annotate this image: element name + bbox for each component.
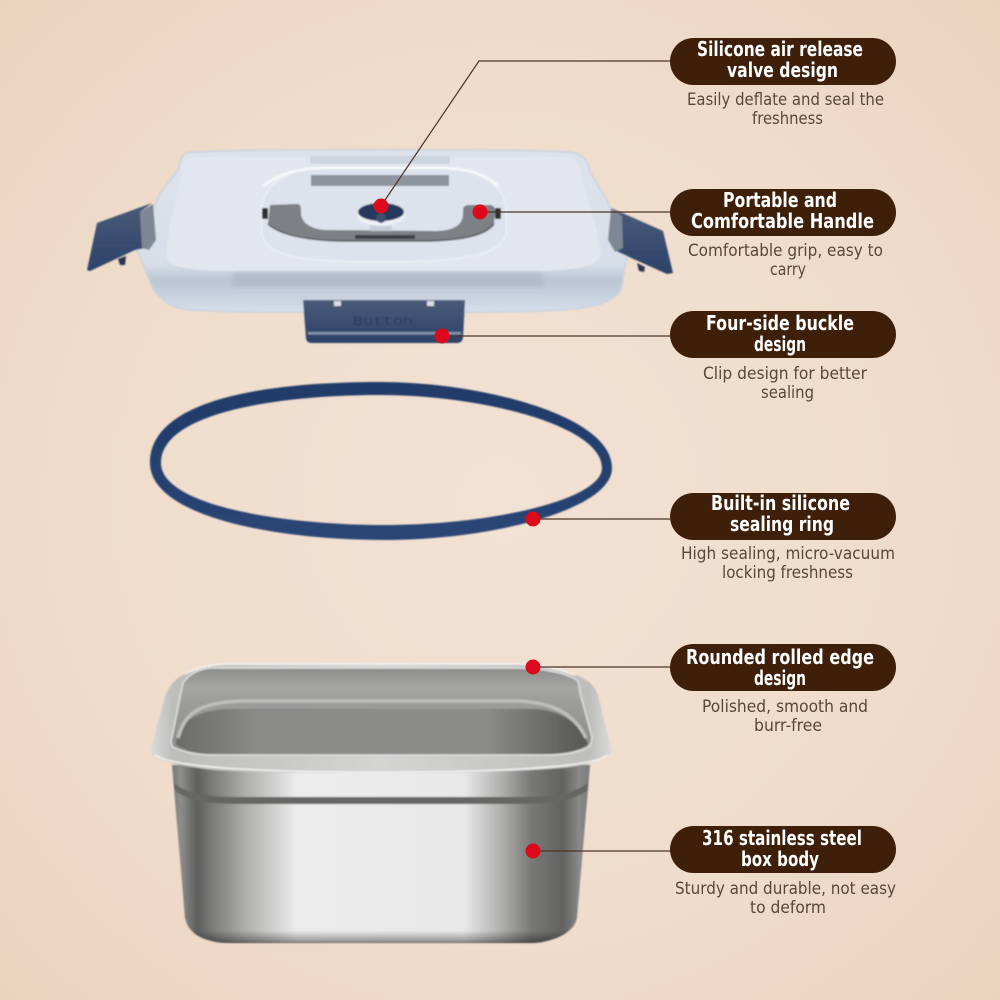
- callout: four-side buckle: sealing: [761, 383, 814, 403]
- callout: portable handle: Comfortable Handle: [691, 209, 874, 233]
- callout: rolled edge: Rounded rolled edge: [686, 645, 874, 669]
- lid illustration: [87, 150, 673, 343]
- callout: portable handle: Comfortable grip, easy to: [688, 241, 883, 261]
- left clip: [87, 203, 156, 271]
- callout: silicone sealing ring: High sealing, micro-vacuum: [681, 544, 895, 564]
- front buckle: [303, 300, 465, 343]
- right clip: [608, 208, 673, 274]
- callout: 316 stainless steel: [670, 826, 896, 918]
- valve: [357, 203, 405, 226]
- handle: [262, 204, 501, 241]
- callout: 316 stainless steel: box body: [741, 847, 819, 871]
- callout: rolled edge: [670, 644, 896, 736]
- steel box: [150, 664, 612, 943]
- box body: [172, 765, 590, 943]
- callout: silicone air release valve: Easily deflate and seal the: [687, 90, 884, 110]
- callout: 316 stainless steel: 316 stainless steel: [702, 826, 862, 850]
- callout: four-side buckle: design: [754, 332, 806, 356]
- box rim: [150, 664, 612, 773]
- marker dots: [374, 198, 540, 858]
- box interior: [171, 668, 592, 755]
- callout: portable handle: Portable and: [723, 188, 837, 212]
- callout: rolled edge: burr-free: [754, 716, 822, 736]
- callout: silicone air release valve: [670, 37, 896, 129]
- callout: portable handle: [670, 188, 896, 280]
- callout: silicone sealing ring: sealing ring: [730, 512, 834, 536]
- lid body: [137, 150, 627, 312]
- callout: 316 stainless steel: to deform: [750, 898, 826, 918]
- callout: silicone air release valve: Silicone air release: [697, 37, 863, 61]
- callout: 316 stainless steel: Sturdy and durable, not easy: [675, 879, 896, 899]
- sealing ring: [150, 382, 612, 540]
- callout: portable handle: carry: [770, 260, 806, 280]
- callout: silicone air release valve: freshness: [752, 109, 823, 129]
- callout: silicone sealing ring: locking freshness: [722, 563, 853, 583]
- leader lines: [381, 61, 670, 851]
- callout: silicone air release valve: valve design: [727, 58, 838, 82]
- callout: four-side buckle: [670, 311, 896, 403]
- callout: silicone sealing ring: [670, 491, 896, 583]
- callout: silicone sealing ring: Built-in silicone: [711, 491, 850, 515]
- front buckle: Button: [353, 314, 413, 329]
- handle latch: [311, 175, 449, 186]
- callout: rolled edge: design: [754, 666, 806, 690]
- callout: four-side buckle: Clip design for better: [703, 364, 867, 384]
- callout: rolled edge: Polished, smooth and: [702, 697, 868, 717]
- handle recess: [262, 168, 506, 262]
- callout: four-side buckle: Four-side buckle: [706, 311, 854, 335]
